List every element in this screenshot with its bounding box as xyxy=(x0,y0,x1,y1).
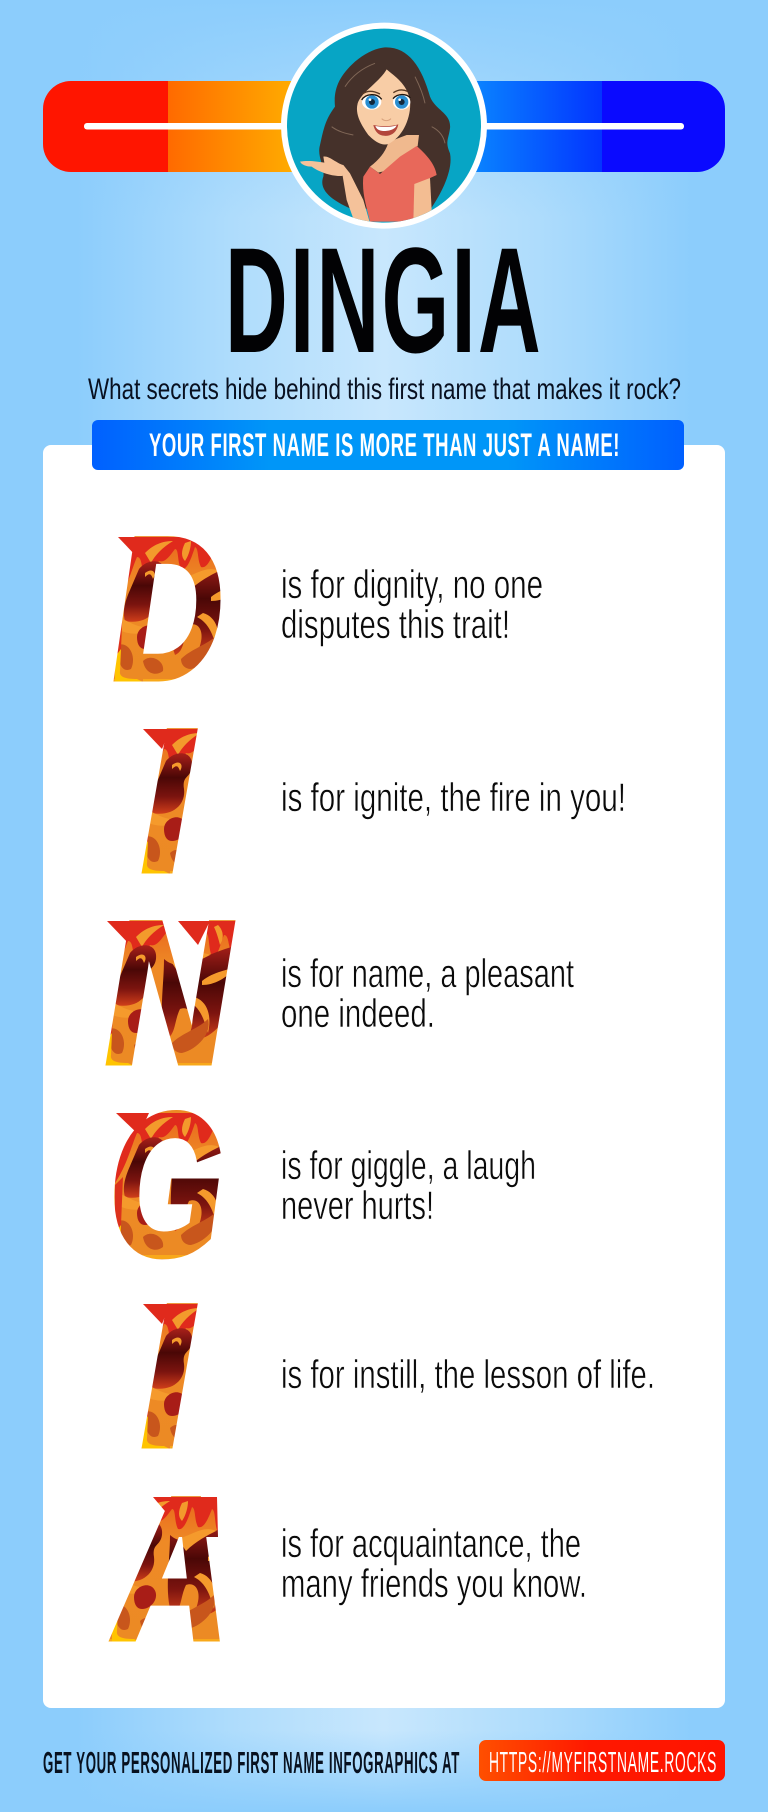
text: G meaning: never hurts! xyxy=(281,1184,434,1228)
brows xyxy=(362,90,408,94)
flame letter I second: I xyxy=(141,1262,196,1490)
flame letter N row xyxy=(105,879,574,1107)
text: D meaning xyxy=(281,563,543,647)
mouth xyxy=(373,124,398,136)
text: A meaning: many friends you know. xyxy=(281,1562,587,1606)
banner xyxy=(92,420,684,470)
text: A meaning xyxy=(281,1522,587,1606)
text: A meaning: is for acquaintance, the xyxy=(281,1522,581,1566)
face xyxy=(357,69,410,144)
flame letter I: I xyxy=(141,687,196,915)
neck xyxy=(370,135,419,173)
flame letter D row xyxy=(113,495,543,723)
text: N meaning xyxy=(281,952,574,1036)
left red segment xyxy=(43,81,168,172)
title: DINGIA xyxy=(225,216,543,384)
flame letter I row xyxy=(141,687,626,915)
shirt xyxy=(363,146,437,222)
text: I meaning: is for ignite, the fire in you! xyxy=(281,776,626,820)
flame letter A row xyxy=(111,1455,587,1683)
eyes xyxy=(362,94,381,110)
text: G meaning xyxy=(281,1144,536,1228)
portrait xyxy=(281,23,487,229)
text: N meaning: is for name, a pleasant xyxy=(281,952,574,996)
hair xyxy=(319,47,451,210)
header bar xyxy=(43,81,725,172)
flame letter I row 2 xyxy=(141,1262,655,1490)
text: D meaning: is for dignity, no one xyxy=(281,563,543,607)
text: G meaning: is for giggle, a laugh xyxy=(281,1144,536,1188)
panel: letters xyxy=(43,445,725,1708)
left arm and hand xyxy=(300,156,370,223)
right arm xyxy=(413,178,432,222)
flame letter D: D xyxy=(113,495,223,723)
flame letter G row xyxy=(109,1071,536,1299)
text: N meaning: one indeed. xyxy=(281,992,435,1036)
flame letter N: N xyxy=(105,879,233,1107)
text: D meaning: disputes this trait! xyxy=(281,603,510,647)
flame letter A: A xyxy=(111,1455,229,1683)
footer link button xyxy=(479,1740,725,1781)
flame letter G: G xyxy=(109,1071,223,1299)
nose xyxy=(382,119,391,121)
